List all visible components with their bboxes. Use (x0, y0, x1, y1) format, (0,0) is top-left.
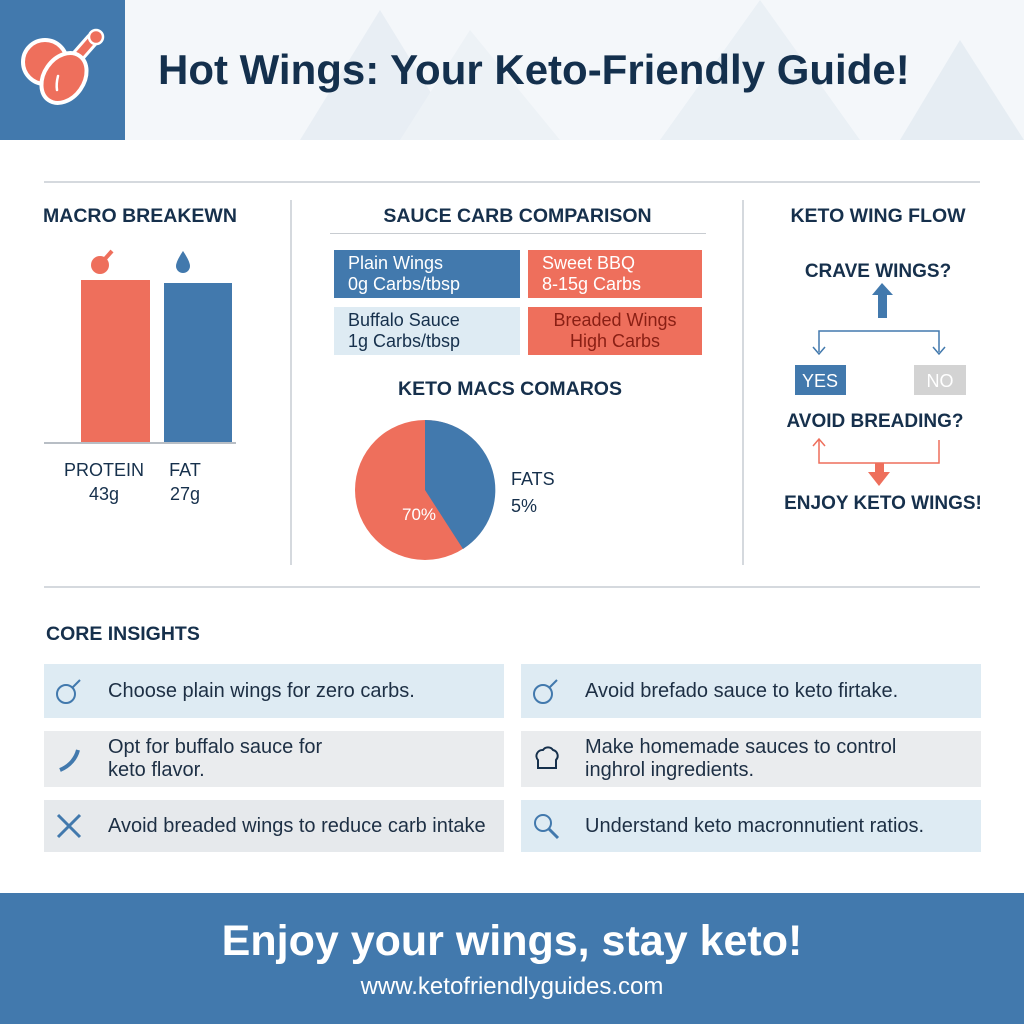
bar chart: 27g (170, 484, 200, 504)
sauce boxes: High Carbs (570, 331, 660, 351)
panel: sauce carb comparison (330, 205, 706, 560)
footer (0, 893, 1024, 1024)
pie chart (355, 420, 496, 560)
flowchart (784, 261, 982, 514)
heading: KETO WING FLOW (790, 205, 966, 227)
panel: sauce carb comparison: FATS (511, 469, 555, 489)
flowchart: ENJOY KETO WINGS! (784, 493, 982, 514)
panel: sauce carb comparison: 5% (511, 496, 537, 516)
insights grid: Avoid brefado sauce to keto firtake. (585, 680, 898, 702)
insights grid: Make homemade sauces to control (585, 736, 896, 758)
flowchart: AVOID BREADING? (787, 411, 963, 432)
insights grid: inghrol ingredients. (585, 759, 754, 781)
insights grid (44, 664, 981, 852)
panel: keto wing flow (784, 205, 982, 514)
pie heading: KETO MACS COMAROS (398, 378, 622, 400)
header (0, 0, 1024, 140)
sauce boxes: 1g Carbs/tbsp (348, 331, 460, 351)
insights grid: Avoid breaded wings to reduce carb intake (108, 814, 486, 836)
flowchart: NO (926, 371, 954, 391)
sauce boxes: Plain Wings (348, 253, 443, 273)
flowchart: CRAVE WINGS? (805, 261, 951, 282)
heading: SAUCE CARB COMPARISON (383, 205, 652, 227)
bar chart: FAT (169, 460, 201, 480)
bar chart (44, 250, 236, 504)
core insights heading: CORE INSIGHTS (46, 623, 200, 645)
insights grid: Opt for buffalo sauce for (108, 736, 322, 758)
title: Hot Wings: Your Keto-Friendly Guide! (158, 46, 910, 93)
bar chart: PROTEIN (64, 460, 144, 480)
footer: Enjoy your wings, stay keto! (222, 917, 802, 965)
sauce boxes (334, 250, 702, 355)
sauce boxes: Breaded Wings (553, 310, 677, 330)
pie chart: 70% (402, 505, 436, 524)
sauce boxes: Buffalo Sauce (348, 310, 460, 330)
flowchart: YES (802, 371, 838, 391)
insights grid: Choose plain wings for zero carbs. (108, 680, 415, 702)
footer: www.ketofriendlyguides.com (361, 973, 663, 1000)
sauce boxes: 8-15g Carbs (542, 274, 641, 294)
bar chart: 43g (89, 484, 119, 504)
sauce boxes: Sweet BBQ (542, 253, 635, 273)
insights grid: Understand keto macronnutient ratios. (585, 814, 924, 836)
heading: MACRO BREAKEWN (43, 205, 237, 227)
insights grid: keto flavor. (108, 759, 205, 781)
panel: macro breakdown (43, 205, 237, 504)
sauce boxes: 0g Carbs/tbsp (348, 274, 460, 294)
icon block (0, 0, 125, 141)
